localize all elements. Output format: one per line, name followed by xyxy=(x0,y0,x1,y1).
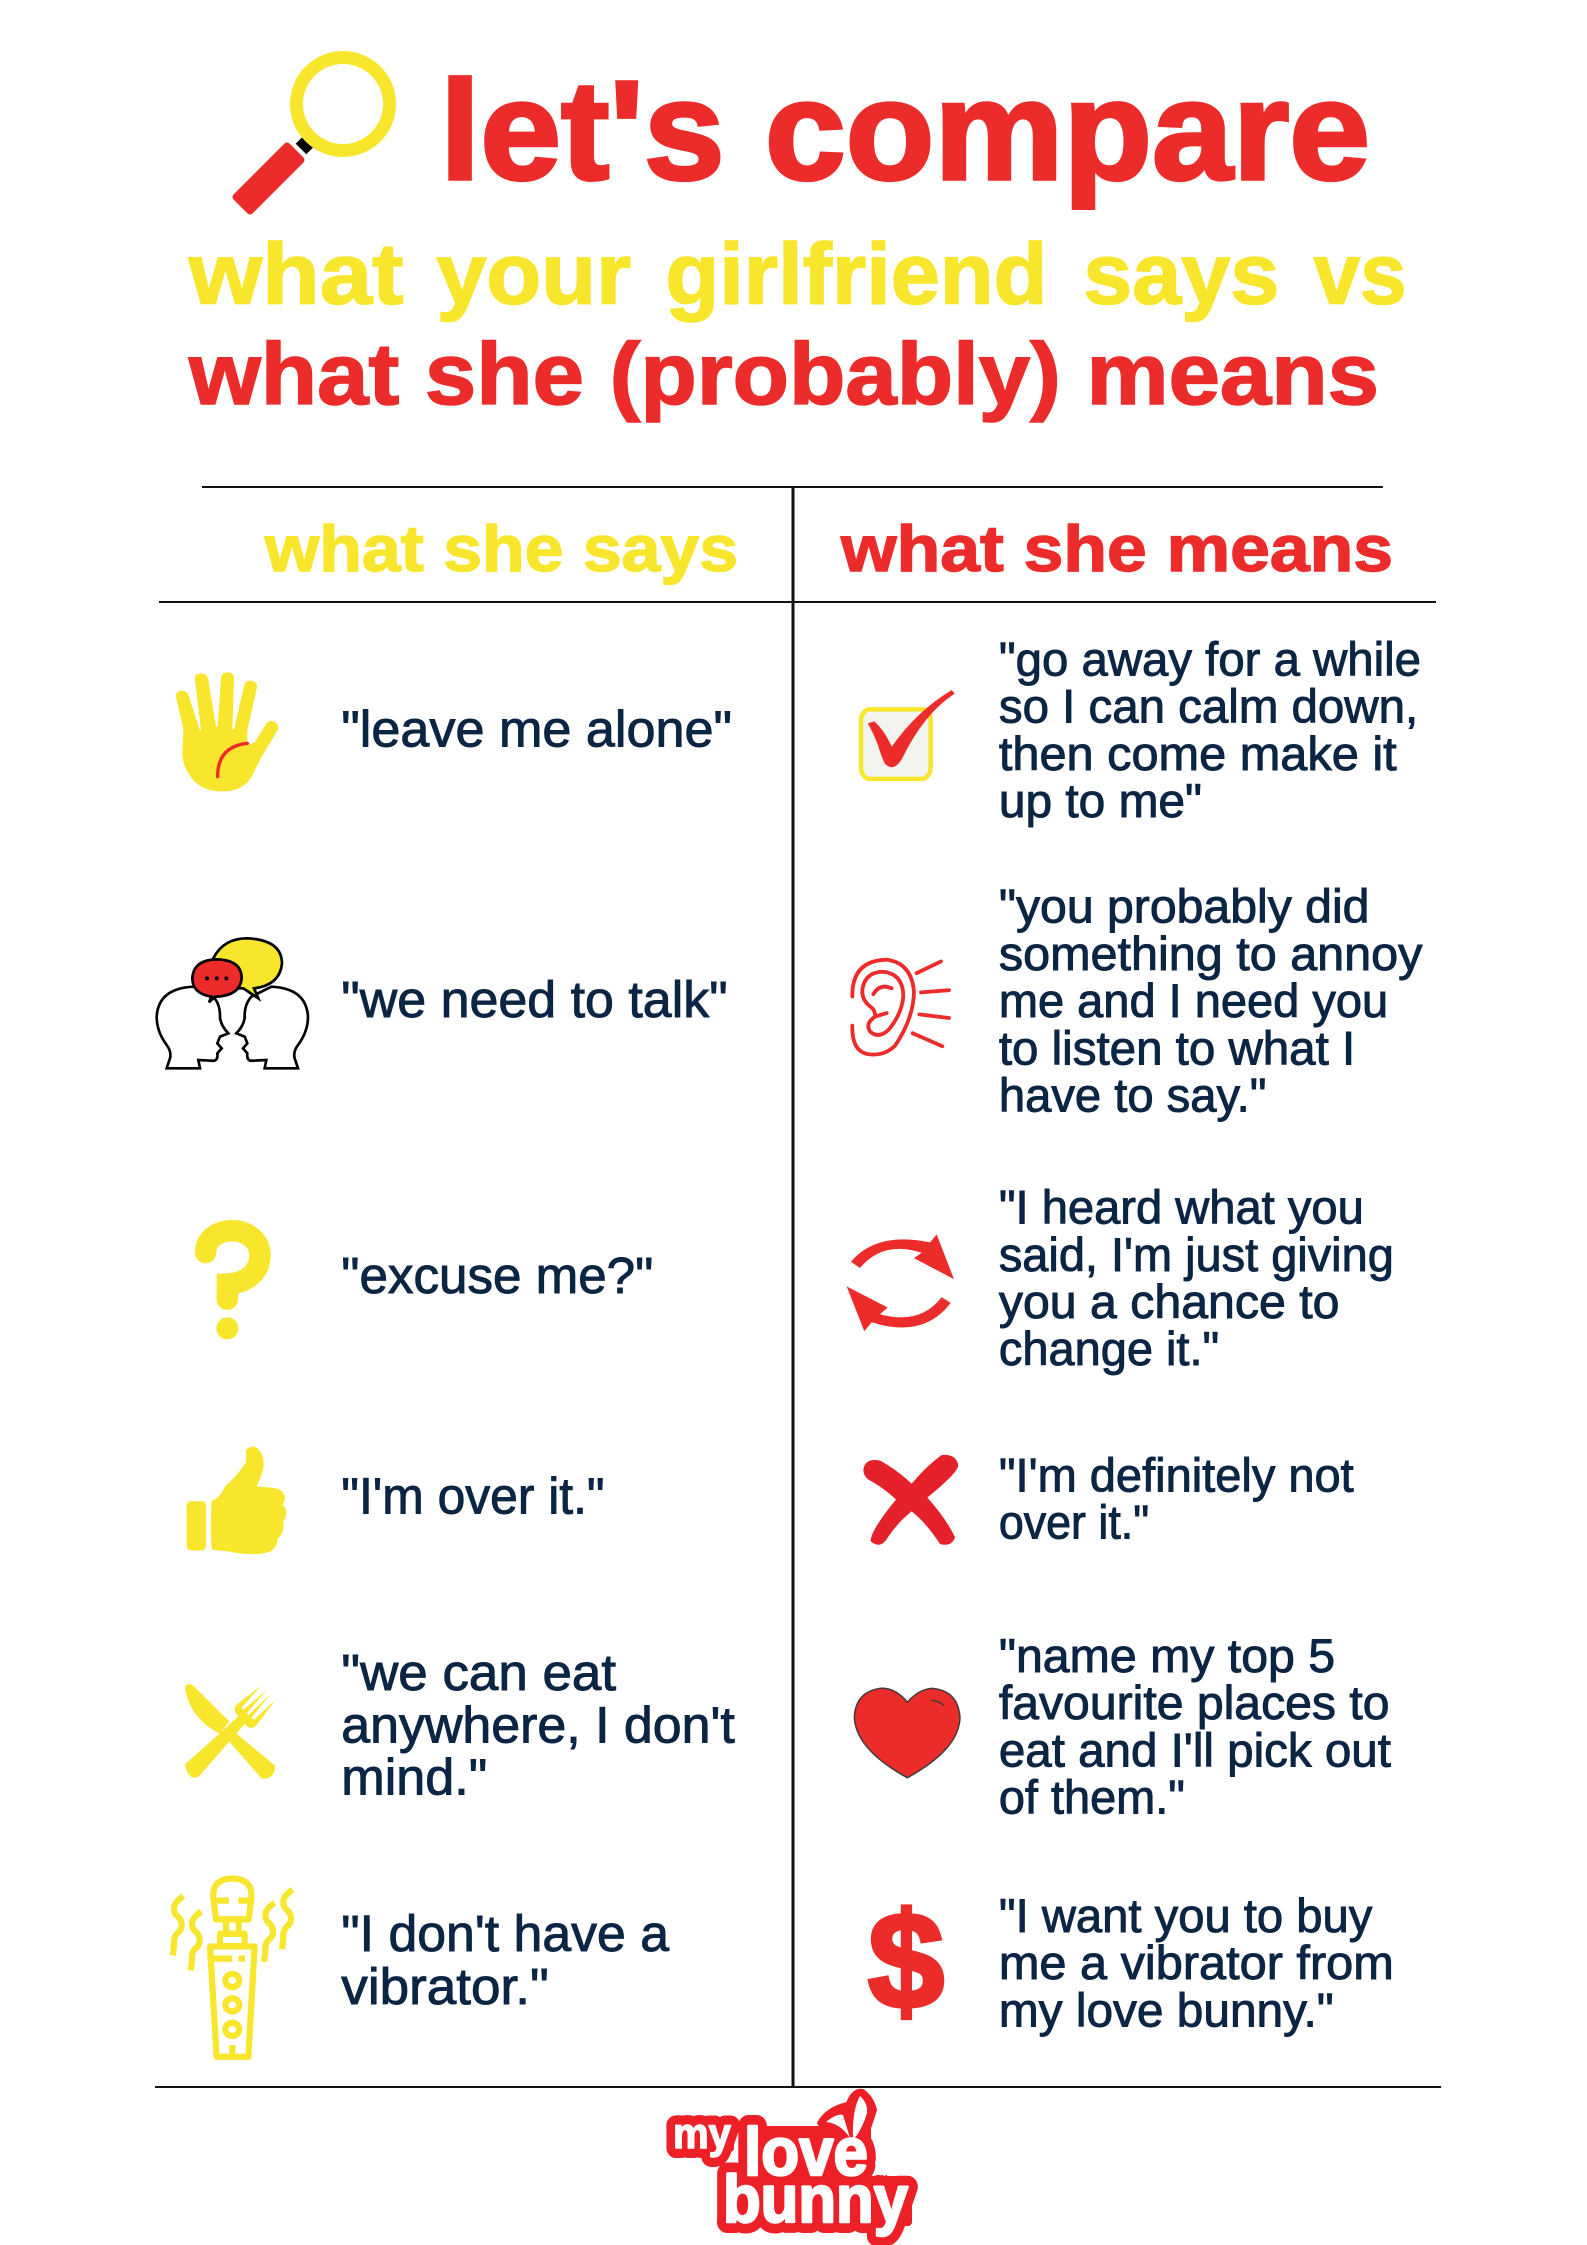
text: buy vibrator: my love bunny." xyxy=(999,1984,1334,2036)
icon: raised hand xyxy=(176,672,278,791)
text: no vibrator: vibrator." xyxy=(341,1958,549,2015)
text: heard you: "I heard what you xyxy=(999,1182,1364,1234)
text: buy vibrator: me a vibrator from xyxy=(999,1937,1394,1989)
text: no vibrator xyxy=(341,1905,670,2015)
text: go away: so I can calm down, xyxy=(999,681,1418,733)
text: top 5: eat and I'll pick out xyxy=(999,1724,1391,1776)
text: heard you: change it." xyxy=(999,1323,1219,1375)
logo lettering: love xyxy=(744,2114,868,2190)
text: not over it: over it." xyxy=(999,1497,1149,1549)
subtitle: what your girlfriend says vs: vs xyxy=(1314,226,1407,322)
icon: two heads talking xyxy=(157,938,308,1068)
subtitle: what your girlfriend says vs: says xyxy=(1083,226,1279,322)
icon: magnifying glass xyxy=(236,58,390,211)
text: eat anywhere: anywhere, I don't xyxy=(341,1696,735,1753)
text: buy vibrator: "I want you to buy xyxy=(999,1890,1373,1942)
logo lettering: my xyxy=(673,2110,731,2158)
subtitle: what she probably means: what she (probably) means xyxy=(188,326,1379,423)
text: annoy: "you probably did xyxy=(999,881,1369,933)
text: no vibrator: "I don't have a xyxy=(341,1905,670,1962)
text: eat anywhere: mind." xyxy=(341,1749,487,1806)
icon: cycle arrows xyxy=(847,1234,954,1331)
text: heard you: you a chance to xyxy=(999,1276,1339,1328)
text: annoy xyxy=(999,881,1423,1122)
text: annoy: to listen to what I xyxy=(999,1022,1355,1074)
panel: what she says text xyxy=(341,700,735,2015)
title: let's compare xyxy=(440,51,1370,209)
text: top 5: "name my top 5 xyxy=(999,1630,1335,1682)
icon: knife and fork xyxy=(185,1684,276,1779)
text: top 5 xyxy=(999,1630,1391,1824)
logo red backing: love xyxy=(744,2114,868,2190)
column heading: what she means: what she means xyxy=(840,512,1393,585)
logo lettering: bunny xyxy=(723,2162,908,2237)
text: go away xyxy=(999,633,1421,827)
logo bunny ears xyxy=(826,2096,867,2138)
icon: checkbox with tick xyxy=(861,691,954,779)
table rules xyxy=(155,487,1441,2087)
text: heard you xyxy=(999,1182,1394,1375)
icon: ear xyxy=(852,960,949,1055)
icon: thumbs up xyxy=(187,1447,286,1554)
icon: vibrator wand xyxy=(173,1878,293,2057)
icon: dollar sign: $ xyxy=(868,1885,944,2038)
text: we need to talk: "we need to talk" xyxy=(341,971,728,1028)
icon: question mark xyxy=(206,1231,260,1339)
logo red backing: bunny xyxy=(723,2162,908,2237)
text: annoy: have to say." xyxy=(999,1070,1266,1122)
text: heard you: said, I'm just giving xyxy=(999,1229,1394,1281)
text: excuse me: "excuse me?" xyxy=(341,1247,653,1304)
text: go away: then come make it xyxy=(999,728,1397,780)
text: not over it: "I'm definitely not xyxy=(999,1449,1354,1501)
text: annoy: something to annoy xyxy=(999,928,1423,980)
text: go away: up to me" xyxy=(999,775,1202,827)
column heading: what she says: what she says xyxy=(264,512,738,585)
text: eat anywhere: "we can eat xyxy=(341,1644,616,1701)
panel: what she means text xyxy=(999,633,1423,2036)
logo: my love bunny xyxy=(673,2090,908,2237)
logo red backing: my xyxy=(673,2110,731,2158)
subtitle: what your girlfriend says vs: what xyxy=(188,226,404,322)
icon: red cross xyxy=(863,1455,958,1545)
text: over it: "I'm over it." xyxy=(341,1468,605,1525)
text: top 5: favourite places to xyxy=(999,1677,1390,1729)
text: eat anywhere xyxy=(341,1644,735,1806)
text: go away: "go away for a while xyxy=(999,633,1421,685)
subtitle: what your girlfriend says vs xyxy=(188,226,1407,322)
subtitle: what your girlfriend says vs: your xyxy=(436,226,631,322)
subtitle: what your girlfriend says vs: girlfriend xyxy=(665,226,1048,322)
text: top 5: of them." xyxy=(999,1772,1185,1824)
icon: heart xyxy=(854,1688,960,1778)
text: not over it xyxy=(999,1449,1354,1549)
logo red backing xyxy=(673,2090,908,2237)
text: buy vibrator xyxy=(999,1890,1394,2036)
text: annoy: me and I need you xyxy=(999,975,1388,1027)
logo lettering xyxy=(673,2110,908,2237)
text: leave me alone: "leave me alone" xyxy=(341,700,732,757)
logo trademark: TM xyxy=(876,2174,888,2183)
